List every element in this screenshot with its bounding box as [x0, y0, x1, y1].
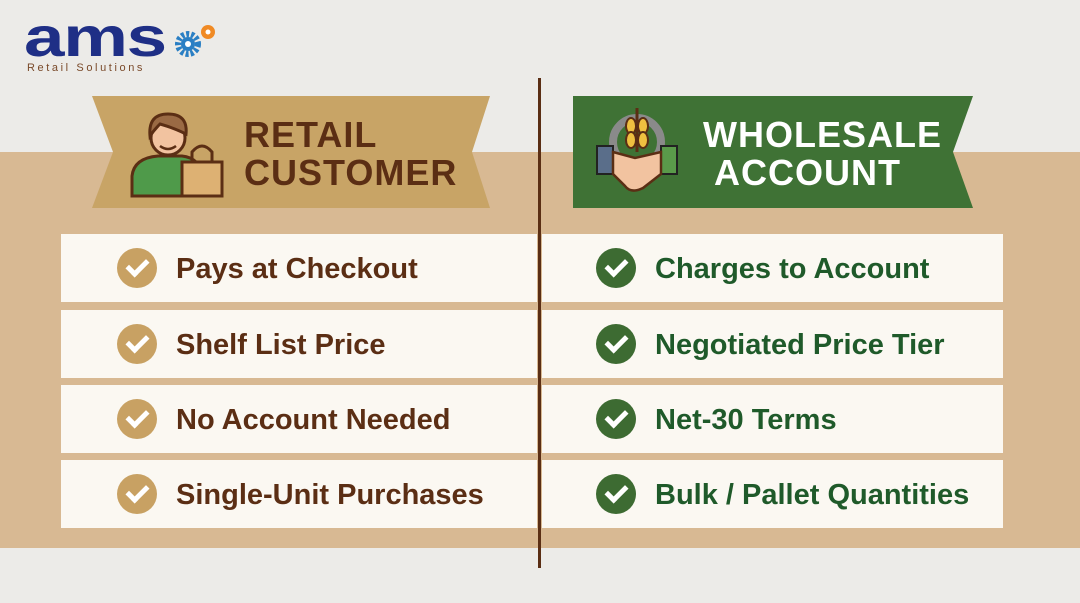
- item: [61, 385, 537, 453]
- item: Net-30 Terms: [655, 404, 837, 436]
- item: [61, 234, 537, 302]
- heading: [244, 114, 457, 193]
- panel: wholesale list: [542, 234, 1003, 528]
- item: Shelf List Price: [176, 329, 386, 361]
- panel: retail list: [61, 234, 537, 528]
- heading: RETAIL: [244, 114, 377, 155]
- heading: ACCOUNT: [714, 152, 901, 193]
- item: [542, 310, 1003, 378]
- heading: [703, 114, 942, 193]
- banner: wholesale account: [573, 96, 973, 208]
- item: [61, 310, 537, 378]
- divider: [538, 78, 541, 568]
- icon: handshake: [596, 108, 678, 192]
- item: [542, 385, 1003, 453]
- item: Bulk / Pallet Quantities: [655, 479, 969, 511]
- item: [61, 460, 537, 528]
- logo: ams: [24, 5, 166, 68]
- logo: [24, 5, 215, 74]
- item: No Account Needed: [176, 404, 450, 436]
- item: Charges to Account: [655, 253, 929, 285]
- heading: CUSTOMER: [244, 152, 457, 193]
- heading: WHOLESALE: [703, 114, 942, 155]
- item: Pays at Checkout: [176, 253, 418, 285]
- item: [542, 460, 1003, 528]
- icon: gears: [175, 25, 215, 57]
- item: Single-Unit Purchases: [176, 479, 484, 511]
- banner: retail customer: [92, 96, 490, 208]
- item: Negotiated Price Tier: [655, 329, 945, 361]
- item: [542, 234, 1003, 302]
- icon: shopper: [130, 112, 224, 198]
- logo: Retail Solutions: [27, 62, 145, 74]
